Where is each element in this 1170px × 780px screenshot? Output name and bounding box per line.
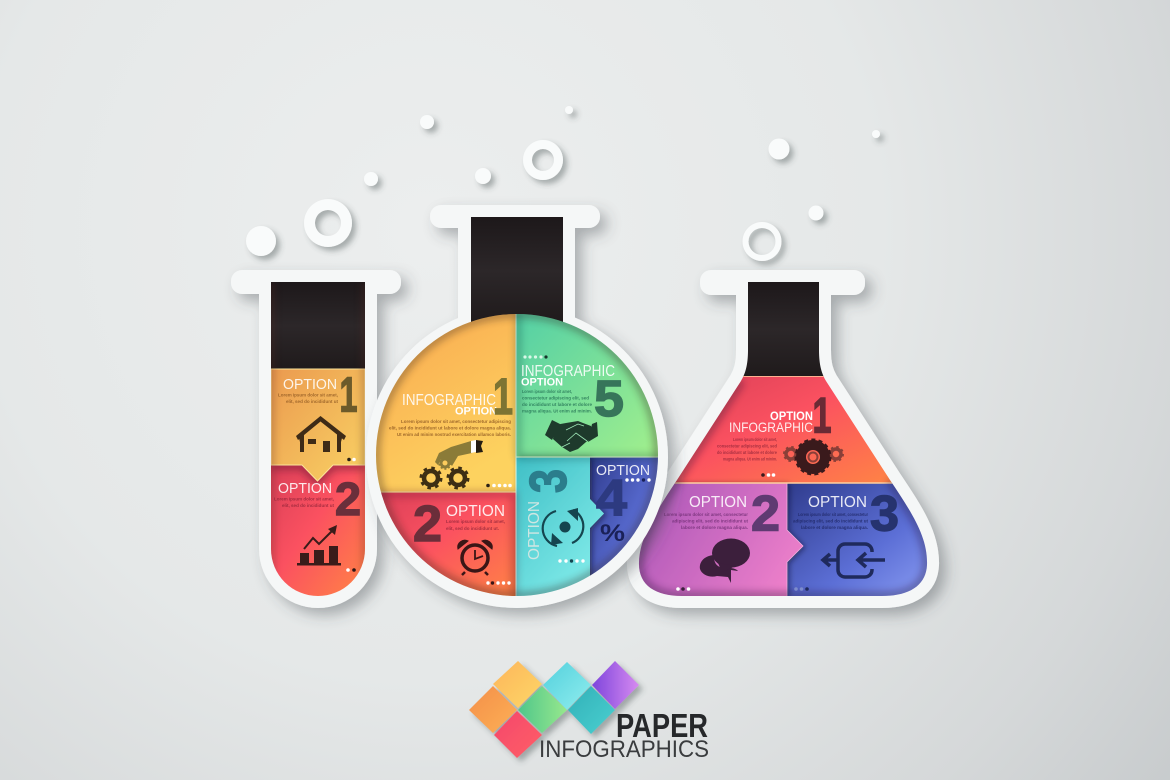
option 1 infographic text: Lorem ipsum dolor sit amet, <box>733 437 777 442</box>
option 1 text: Lorem ipsum dolor sit amet, <box>278 392 338 398</box>
option 2 text: adipiscing elit, sed do incididunt ut <box>672 518 748 524</box>
logo wordmark: PAPER <box>616 707 708 744</box>
option 1 text: elit, sed do incididunt ut <box>286 399 338 404</box>
segment 5 text: consectetur adipiscing elit, sed <box>522 396 589 400</box>
test tube liquid <box>271 282 365 600</box>
segment 5 text: Lorem ipsum dolor sit amet, <box>522 389 572 394</box>
segment 4 text: 4 <box>596 469 628 526</box>
icon: hand with gears <box>421 440 483 488</box>
segment 5 text: 5 <box>594 370 624 427</box>
option 2 text: OPTION <box>689 494 747 511</box>
conical flask liquid <box>630 282 932 596</box>
option 2 text: 2 <box>751 486 780 542</box>
option 2 text: 2 <box>335 473 361 525</box>
segment 1 text: OPTION <box>455 406 497 418</box>
option 3 text: 3 <box>870 486 899 542</box>
test tube <box>231 270 401 608</box>
conical flask <box>630 270 932 596</box>
option 2 text <box>274 473 361 525</box>
round flask segments <box>372 310 661 598</box>
segment 1 text: 1 <box>493 368 513 425</box>
icon: alarm clock <box>458 540 492 575</box>
option 1 infographic text: do incididunt ut labore et dolore <box>717 450 777 455</box>
segment 5 text: do incididunt ut labore et dolore <box>522 402 592 407</box>
icon: speech bubbles <box>700 538 750 583</box>
option 2 text <box>664 486 780 542</box>
pagination dots <box>346 568 356 572</box>
option 1 text: OPTION <box>283 376 337 393</box>
pagination dots <box>625 478 651 482</box>
option 2 text: elit, sed do incididunt ut <box>282 503 334 508</box>
pagination dots <box>558 559 585 563</box>
segment 1 text: INFOGRAPHIC <box>402 392 496 409</box>
logo wordmark <box>539 707 709 763</box>
pagination dots <box>523 355 548 359</box>
segment 3 text: 3 <box>520 469 578 493</box>
pagination dots <box>486 581 511 585</box>
conical flask glass outline <box>639 270 927 596</box>
icon: login arrows <box>823 544 885 577</box>
option 3 text: OPTION <box>808 494 867 511</box>
option 1 infographic text: consectetur adipiscing elit, sed <box>717 444 777 448</box>
option 3 text <box>793 486 899 542</box>
option 1 infographic text: INFOGRAPHIC <box>729 419 813 435</box>
segment 3 text: OPTION <box>526 501 543 560</box>
round flask glass outline <box>366 205 668 608</box>
pagination dots <box>486 484 512 487</box>
icon: house <box>296 416 346 452</box>
segment 1 text: elit, sed do incididunt ut labore et dolore magna aliqua. <box>389 426 511 430</box>
logo <box>469 661 709 763</box>
segment 4 text: OPTION <box>596 462 650 479</box>
icon: growth chart <box>297 525 341 566</box>
segment 5 text: magna aliqua. Ut enim ad minim. <box>522 408 592 414</box>
logo wordmark: INFOGRAPHICS <box>539 736 709 763</box>
segment 4 text: % <box>600 520 625 547</box>
segment 2 text <box>413 495 505 552</box>
option 2 text: OPTION <box>278 480 332 497</box>
segment 5 text: INFOGRAPHIC <box>521 363 615 380</box>
segment 5 text <box>521 363 624 427</box>
option 3 text: adipiscing elit, sed do incididunt ut <box>793 518 868 524</box>
icon: sync arrows <box>543 508 583 546</box>
segment 4 text <box>596 462 650 547</box>
round flask <box>366 205 668 608</box>
option 1 text <box>278 368 358 422</box>
icon: handshake <box>545 420 598 452</box>
segment 2 text: Lorem ipsum dolor sit amet, <box>446 519 505 524</box>
option 3 text: Lorem ipsum dolor sit amet, consectetur <box>798 512 868 517</box>
segment 1 text: Ut enim ad minim nostrud exercitation ullamco laboris. <box>397 432 511 437</box>
option 3 text: labore et dolore magna aliqua. <box>801 525 868 530</box>
logo mosaic <box>469 661 639 758</box>
icon: gears <box>784 440 843 474</box>
bubbles and rings <box>246 106 880 261</box>
round flask neck <box>471 217 563 325</box>
segment 5 text: OPTION <box>521 376 563 388</box>
option 1 infographic text <box>717 388 832 462</box>
option 1 infographic text: 1 <box>812 388 832 444</box>
option 1 infographic text: magna aliqua. Ut enim ad minim. <box>723 456 777 462</box>
pagination dots <box>761 473 775 477</box>
option 2 text: Lorem ipsum dolor sit amet, consectetur <box>664 512 748 517</box>
option 2 text: Lorem ipsum dolor sit amet, <box>274 496 334 502</box>
pagination dots <box>347 458 356 461</box>
test tube glass outline <box>231 270 401 608</box>
segment 2 text: 2 <box>413 495 442 552</box>
option 1 infographic text: OPTION <box>770 411 813 423</box>
segment 1 text: Lorem ipsum dolor sit amet, consectetur adipiscing <box>401 419 511 424</box>
segment 1 text <box>389 368 513 437</box>
segment 2 text: elit, sed do incididunt ut. <box>446 526 499 531</box>
segment 2 text: OPTION <box>446 503 505 520</box>
segment 3 text <box>520 469 578 560</box>
pagination dots <box>794 587 809 591</box>
pagination dots <box>676 587 690 591</box>
option 2 text: labore et dolore magna aliqua. <box>681 525 748 530</box>
option 1 text: 1 <box>340 368 358 422</box>
